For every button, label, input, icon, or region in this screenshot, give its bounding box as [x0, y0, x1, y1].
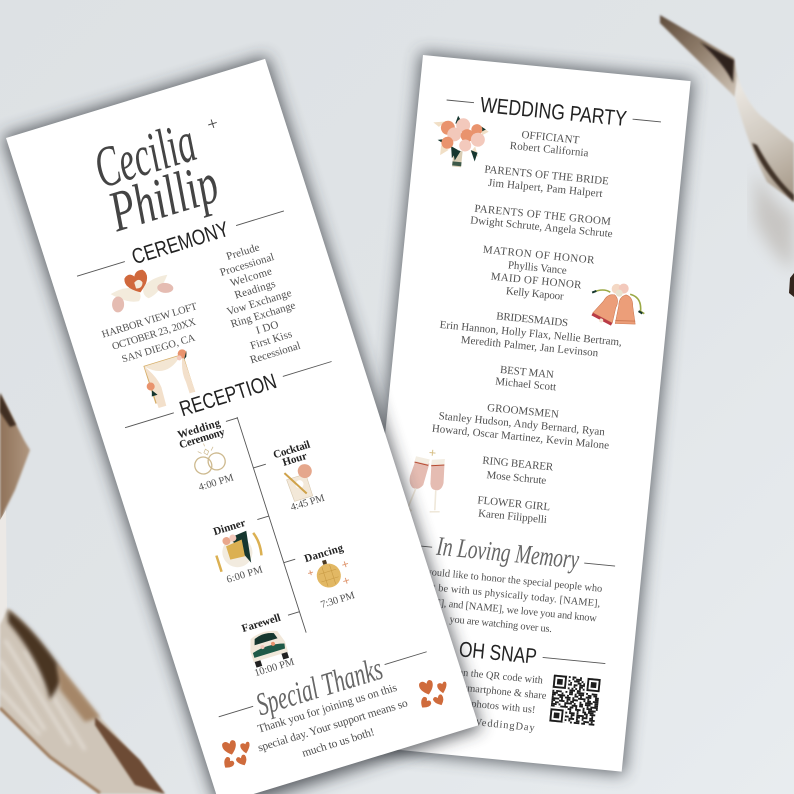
- text: venue: SAN DIEGO, CA: [121, 333, 197, 365]
- text: party list: Meredith Palmer, Jan Levinson: [460, 334, 599, 359]
- text: party list: BRIDESMAIDS: [496, 310, 569, 329]
- text: ceremony order: Prelude: [225, 241, 261, 263]
- text: party list: Jim Halpert, Pam Halpert: [487, 177, 603, 200]
- icon: floral arch: [139, 348, 201, 410]
- icon: qr code: [549, 675, 601, 726]
- event: cocktail hour: [272, 439, 328, 514]
- text: party list: Robert California: [509, 140, 589, 159]
- text: party list: OFFICIANT: [521, 129, 580, 147]
- text: venue: [101, 301, 208, 369]
- event: farewell: Farewell: [240, 612, 282, 635]
- event: cocktail hour: 4:45 PM: [289, 493, 326, 513]
- event: dancing: [302, 542, 360, 612]
- text: ceremony order: Welcome: [229, 265, 274, 289]
- panel: wedding party card: [354, 55, 691, 772]
- icon: hearts left: [215, 735, 256, 773]
- text: party list: Phyllis Vance: [507, 259, 567, 277]
- event: dinner: Dinner: [212, 517, 247, 538]
- text: memory note: cannot be with us physically today. [NAME],: [407, 580, 601, 610]
- panel: program card: [6, 59, 479, 794]
- text: party list: Stanley Hudson, Andy Bernard, Ryan: [438, 410, 606, 438]
- text: ceremony order: Vow Exchange: [225, 287, 293, 318]
- event: wedding ceremony: 4:00 PM: [197, 472, 235, 493]
- text: qr instructions: your photos with us!: [449, 697, 536, 716]
- title: couple names: Cecilia: [87, 111, 203, 201]
- text: party list: Karen Filippelli: [478, 508, 547, 526]
- text: qr instructions: [438, 666, 549, 735]
- event: dinner: 6:00 PM: [225, 564, 264, 586]
- text: party list: Howard, Oscar Martinez, Kevin Malone: [431, 423, 610, 452]
- icon: champagne flutes: [404, 448, 447, 514]
- text: venue: HARBOR VIEW LOFT: [101, 301, 199, 341]
- event: dancing: Dancing: [303, 542, 345, 565]
- event: wedding ceremony: Wedding: [176, 417, 222, 441]
- text: ceremony order: [209, 237, 309, 369]
- leaf: top right: [660, 15, 794, 297]
- text: party list: Dwight Schrute, Angela Schrute: [470, 214, 613, 240]
- heading: oh snap: OH SNAP: [458, 638, 538, 669]
- text: ceremony order: First Kiss: [249, 328, 294, 352]
- event: wedding ceremony: [175, 416, 241, 495]
- title: couple names: +: [203, 113, 222, 136]
- event: farewell: 10:00 PM: [253, 657, 296, 679]
- text: ceremony order: I DO: [254, 319, 280, 337]
- heading: reception: RECEPTION: [177, 370, 280, 422]
- text: party list: RING BEARER: [482, 455, 554, 474]
- event: wedding ceremony: Ceremony: [178, 426, 227, 451]
- script heading: in loving memory: In Loving Memory: [434, 531, 581, 574]
- text: memory note: [403, 565, 603, 640]
- text: qr instructions: Scan the QR code with: [448, 666, 544, 687]
- text: party list: MATRON OF HONOR: [482, 244, 596, 267]
- text: ceremony order: Recessional: [249, 340, 302, 366]
- event: dinner: [208, 515, 269, 586]
- text: party list: Kelly Kapoor: [505, 285, 565, 303]
- text: party list: PARENTS OF THE GROOM: [474, 203, 612, 228]
- text: qr instructions: #OurWeddingDay: [446, 714, 536, 734]
- text: qr instructions: your smartphone & share: [441, 681, 547, 702]
- title: couple names: Phillip: [101, 152, 226, 245]
- text: memory note: you are watching over us.: [449, 614, 553, 635]
- text: party list: BEST MAN: [499, 364, 554, 381]
- text: party list: GROOMSMEN: [487, 402, 560, 421]
- event: dancing: 7:30 PM: [319, 590, 356, 611]
- text: party list: Mose Schrute: [486, 469, 547, 487]
- shadow: right card: [354, 55, 691, 772]
- icon: bouquet: [429, 113, 490, 170]
- text: thank-you note: special day. Your support means so: [256, 697, 410, 754]
- text: party list: FLOWER GIRL: [477, 494, 551, 513]
- text: party list: [421, 123, 642, 532]
- event: farewell: [239, 612, 296, 679]
- event: cocktail hour: Hour: [281, 450, 309, 469]
- leaf: left edge: [0, 393, 165, 794]
- text: memory note: [NAME], and [NAME], we love you and know: [407, 595, 598, 625]
- heading: ceremony: CEREMONY: [129, 218, 232, 270]
- text: thank-you note: much to us both!: [301, 726, 376, 760]
- text: venue: OCTOBER 23, 20XX: [111, 317, 198, 353]
- text: memory note: We would like to honor the special people who: [408, 565, 603, 595]
- icon: bells: [589, 281, 647, 331]
- text: thank-you note: Thank you for joining us on this: [256, 682, 399, 736]
- text: party list: Erin Hannon, Holly Flax, Nellie Bertram,: [439, 319, 623, 349]
- text: party list: PARENTS OF THE BRIDE: [484, 164, 610, 188]
- heading: wedding party: WEDDING PARTY: [479, 94, 628, 132]
- text: party list: MAID OF HONOR: [490, 271, 583, 291]
- text: ceremony order: Processional: [219, 251, 276, 279]
- shadow: left card: [6, 59, 478, 794]
- text: thank-you note: [251, 680, 415, 771]
- timeline: [175, 394, 374, 680]
- text: ceremony order: Readings: [233, 278, 277, 302]
- text: party list: Michael Scott: [495, 376, 557, 393]
- text: ceremony order: Ring Exchange: [229, 299, 297, 330]
- script heading: special thanks: Special Thanks: [251, 650, 387, 723]
- icon: doves and heart: [102, 262, 178, 316]
- title: couple names: [87, 102, 246, 245]
- event: cocktail hour: Cocktail: [272, 439, 312, 461]
- icon: hearts right: [412, 675, 453, 712]
